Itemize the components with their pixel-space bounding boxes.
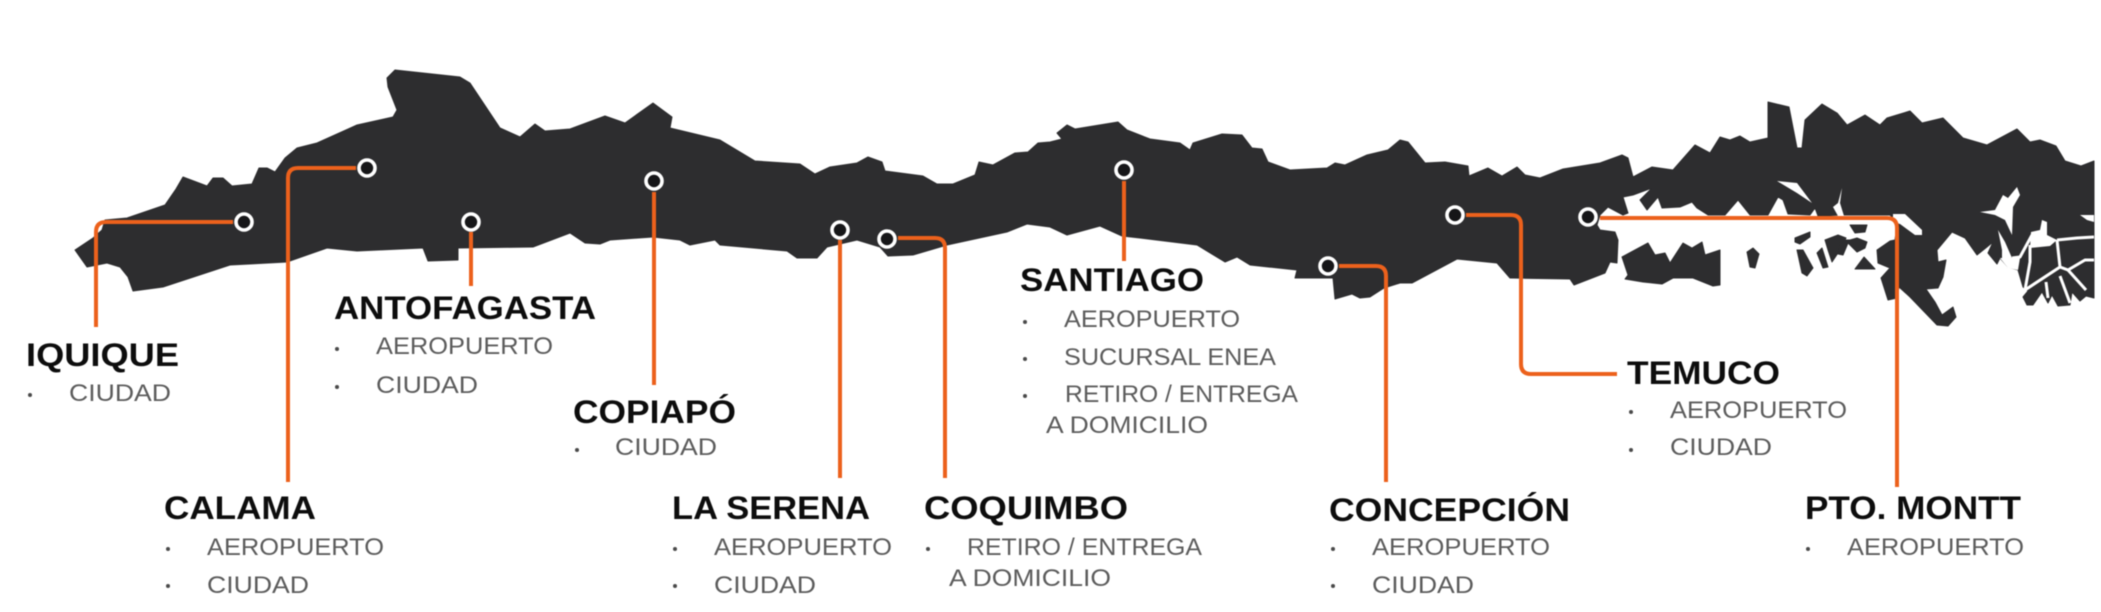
marker: Iquique	[236, 214, 252, 230]
label: Coquimbo	[924, 490, 1202, 592]
label: Concepción	[1329, 491, 1570, 599]
connector: Temuco	[1466, 215, 1617, 374]
label: Santiago: SUCURSAL ENEA	[1064, 344, 1276, 371]
label: Temuco: CIUDAD	[1670, 434, 1772, 461]
connector: Antofagasta	[469, 232, 473, 286]
label: Santiago: AEROPUERTO	[1064, 306, 1240, 333]
label: La Serena: AEROPUERTO	[714, 534, 892, 561]
label: Calama	[164, 490, 384, 599]
label: Iquique: CIUDAD	[69, 380, 171, 407]
label: Pto. Montt: PTO. MONTT	[1805, 490, 2021, 526]
label: Antofagasta: AEROPUERTO	[376, 333, 553, 360]
label: Santiago	[1020, 262, 1298, 439]
label: Calama: CIUDAD	[207, 572, 309, 599]
label: Pto. Montt: AEROPUERTO	[1847, 534, 2024, 561]
connector: La Serena	[838, 240, 842, 478]
connector: Concepción	[1339, 266, 1386, 482]
label: Copiapó: COPIAPÓ	[573, 393, 736, 430]
label: Temuco: TEMUCO	[1627, 355, 1780, 391]
connector: Copiapó	[652, 192, 656, 385]
marker: Pto. Montt	[1580, 209, 1596, 225]
label: Copiapó: CIUDAD	[615, 434, 717, 461]
label: Santiago: A DOMICILIO	[1046, 412, 1208, 439]
label: Concepción: CIUDAD	[1372, 572, 1474, 599]
connector: Santiago	[1122, 181, 1126, 261]
marker: Coquimbo	[879, 231, 895, 247]
label: Calama: AEROPUERTO	[207, 534, 384, 561]
label: Pto. Montt	[1805, 490, 2024, 561]
label: Calama: CALAMA	[164, 490, 316, 526]
label: Coquimbo: A DOMICILIO	[949, 565, 1111, 592]
marker: Concepción	[1320, 258, 1336, 274]
label: La Serena: LA SERENA	[672, 490, 870, 526]
label: Concepción: CONCEPCIÓN	[1329, 491, 1570, 528]
map of Chile	[75, 70, 2094, 326]
label: Temuco: AEROPUERTO	[1670, 397, 1847, 424]
marker: Santiago	[1116, 162, 1132, 178]
marker: Calama	[359, 160, 375, 176]
label: Iquique: IQUIQUE	[26, 337, 179, 373]
marker: La Serena	[832, 222, 848, 238]
label: Concepción: AEROPUERTO	[1372, 534, 1550, 561]
connector: Pto. Montt	[1600, 218, 1897, 487]
connector: Coquimbo	[898, 238, 945, 478]
marker: Antofagasta	[463, 214, 479, 230]
label: La Serena	[672, 490, 892, 599]
label: Temuco	[1627, 355, 1847, 461]
label: Iquique	[26, 337, 179, 407]
connector: Iquique	[96, 222, 233, 327]
marker: Temuco	[1447, 207, 1463, 223]
label: Santiago: RETIRO / ENTREGA	[1065, 381, 1298, 408]
label: Coquimbo: COQUIMBO	[924, 490, 1128, 526]
label: Antofagasta: ANTOFAGASTA	[334, 290, 596, 326]
label: Antofagasta: CIUDAD	[376, 372, 478, 399]
label: La Serena: CIUDAD	[714, 572, 816, 599]
marker: Copiapó	[646, 173, 662, 189]
label: Coquimbo: RETIRO / ENTREGA	[967, 534, 1202, 561]
label: Copiapó	[573, 393, 736, 461]
connector: Calama	[288, 168, 356, 482]
label: Santiago: SANTIAGO	[1020, 262, 1204, 298]
label: Antofagasta	[334, 290, 596, 399]
